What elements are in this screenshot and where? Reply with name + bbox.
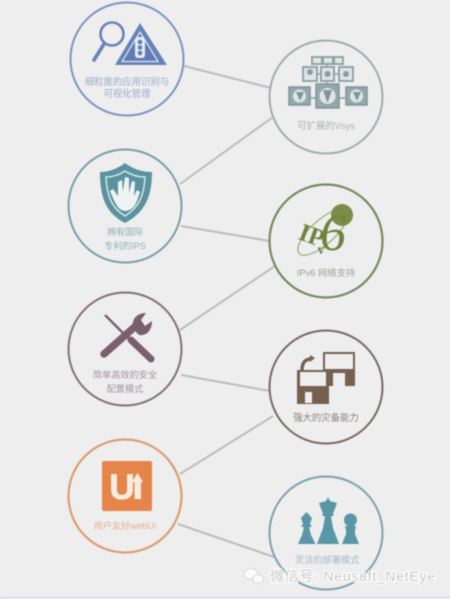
label: 专利的IPS <box>104 240 146 251</box>
panel: friendly web UI <box>68 440 182 552</box>
icon: magnifier <box>94 22 124 60</box>
panel: disaster recovery <box>270 330 382 444</box>
icon: shield with hand <box>100 163 152 223</box>
watermark text: 微信号: Neusoft_NetEye <box>270 568 435 584</box>
icon: IPv6 logo: v <box>318 243 324 258</box>
panel: scalable Vsys <box>270 40 382 154</box>
icon: IPv6 logo: 6 <box>320 205 346 262</box>
label: 可扩展的Vsys <box>297 120 355 131</box>
icon: floppy disks with arrow <box>297 352 355 404</box>
connector lines <box>178 66 275 557</box>
panel: application identification <box>70 2 184 116</box>
watermark <box>244 568 435 584</box>
icon: wechat bubbles <box>244 568 264 584</box>
label: 细粒度的应用识别与 <box>85 76 169 87</box>
label: 配置模式 <box>107 383 143 394</box>
icon: Vsys hierarchy <box>289 57 367 108</box>
label: 可视化管理 <box>104 88 151 99</box>
label: 灵活的部署模式 <box>295 554 359 565</box>
icon: chess pieces <box>298 497 359 544</box>
label: 简单高效的安全 <box>93 369 157 380</box>
label: 用户友好webUI <box>94 520 156 531</box>
panel: flexible deployment <box>270 476 382 590</box>
label: IPv6 网络支持 <box>297 267 355 278</box>
icon: warning triangle with traffic light <box>115 23 167 65</box>
icon: UI tile: U <box>109 468 135 507</box>
panel: simple security config <box>68 292 182 406</box>
panel: IPv6 support <box>270 184 382 298</box>
icon: IPv6 logo <box>291 202 355 262</box>
icon: wrench and screwdriver <box>104 313 152 359</box>
icon: IPv6 logo: IP <box>295 219 328 253</box>
label: 拥有国际 <box>107 226 143 237</box>
panel: patented IPS <box>68 150 182 262</box>
label: 强大的灾备能力 <box>293 412 359 423</box>
